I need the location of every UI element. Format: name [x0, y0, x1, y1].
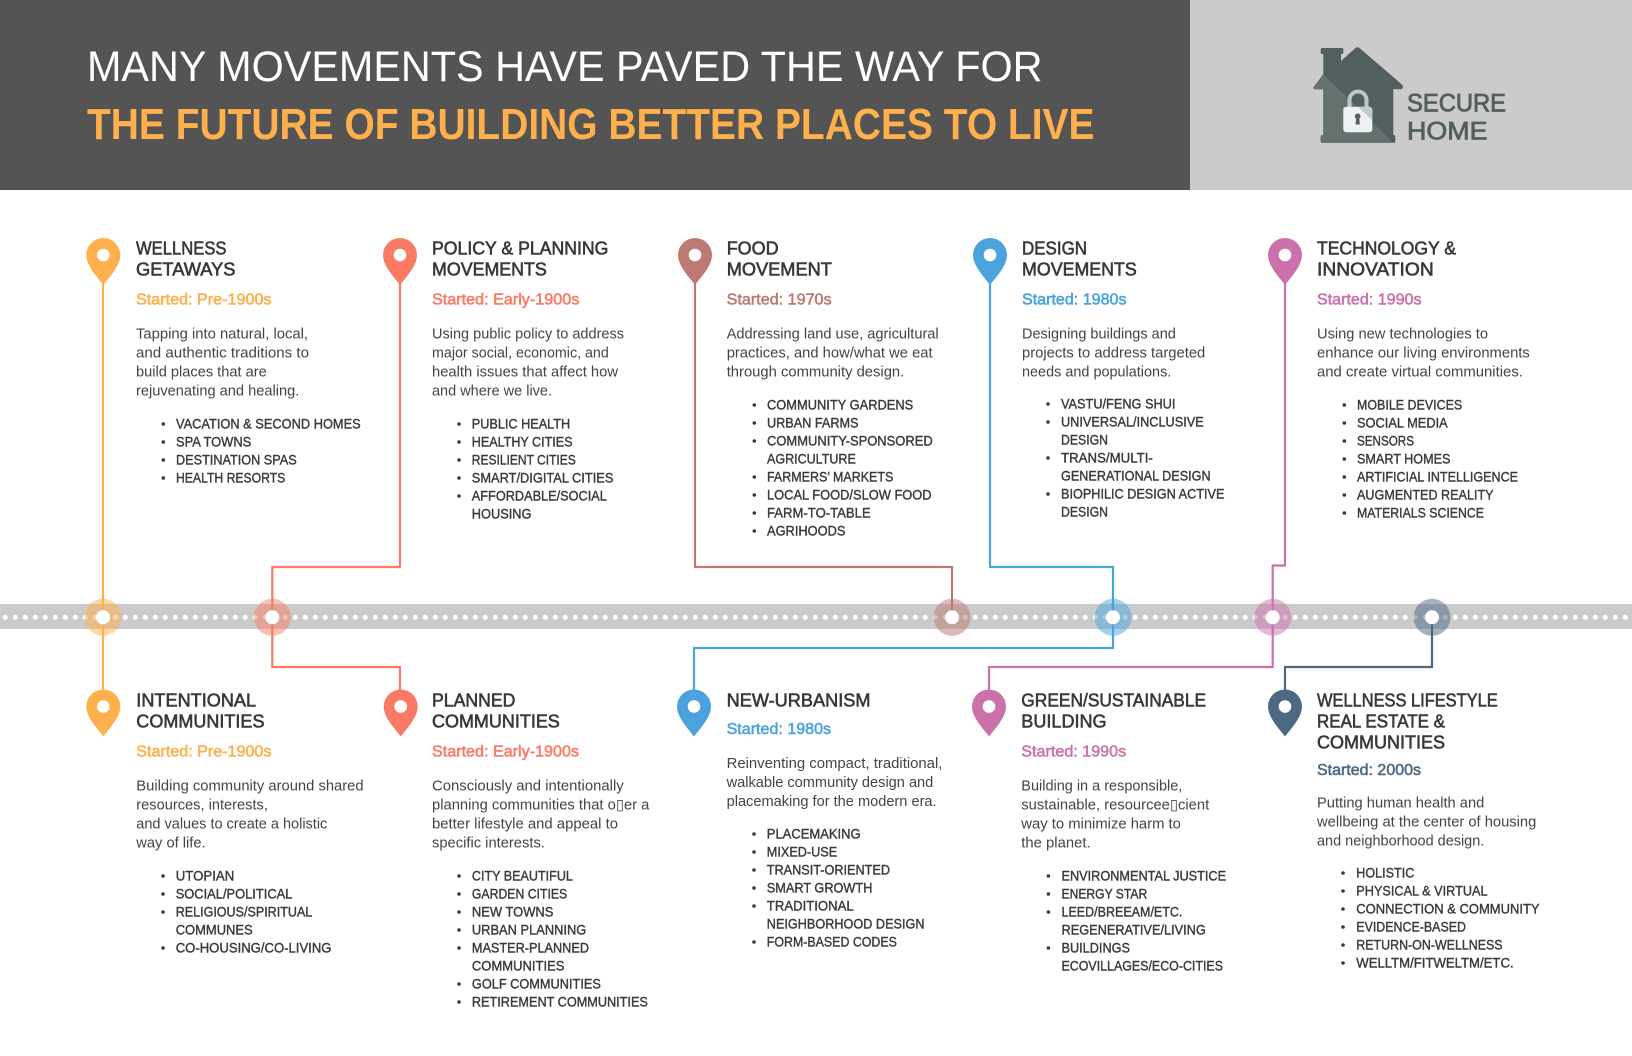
bullet list: CONNECTION & COMMUNITY	[1356, 901, 1540, 916]
description: sustainable, resourcee▯cient	[1021, 798, 1209, 814]
description: way to minimize harm to	[1020, 817, 1181, 833]
heading: REAL ESTATE &	[1317, 711, 1446, 732]
heading: WELLNESS LIFESTYLE	[1317, 690, 1498, 711]
bullet list: COMMUNITIES	[472, 958, 564, 973]
bullet list: NEW TOWNS	[472, 904, 553, 919]
header banner	[0, 0, 1190, 190]
bullet list: AFFORDABLE/SOCIAL	[472, 488, 607, 503]
bullet list: COMMUNITY-SPONSORED	[767, 433, 933, 448]
bullet list: AUGMENTED REALITY	[1357, 487, 1494, 502]
bullet list: GOLF COMMUNITIES	[472, 976, 601, 991]
description: and authentic traditions to	[136, 346, 309, 362]
heading	[136, 690, 264, 732]
heading: MOVEMENTS	[1022, 258, 1137, 279]
bullet list: PUBLIC HEALTH	[472, 416, 570, 431]
description	[1317, 327, 1530, 381]
bullet list: ENVIRONMENTAL JUSTICE	[1062, 868, 1226, 883]
bullet list: REGENERATIVE/LIVING	[1062, 922, 1206, 937]
description	[432, 779, 650, 852]
bullet list: DESIGN	[1061, 504, 1108, 519]
panel: wellness getaways	[86, 237, 361, 485]
bullet list: SOCIAL MEDIA	[1357, 415, 1448, 430]
logo wordmark: HOME	[1407, 117, 1488, 145]
bullet list: EVIDENCE-BASED	[1356, 919, 1466, 934]
bullet list: PHYSICAL & VIRTUAL	[1356, 883, 1488, 898]
start date: Started: 1980s	[1022, 291, 1127, 308]
description: enhance our living environments	[1317, 346, 1530, 362]
start date: Started: 1970s	[727, 291, 832, 308]
description: needs and populations.	[1022, 365, 1171, 381]
heading: INTENTIONAL	[136, 690, 256, 711]
bullet list: VACATION & SECOND HOMES	[176, 416, 361, 431]
panel: intentional communities	[86, 690, 364, 955]
panel: planned communities	[384, 690, 650, 1009]
description: planning communities that o▯er a	[432, 798, 650, 814]
heading: FOOD	[727, 237, 779, 258]
heading: COMMUNITIES	[1317, 732, 1445, 753]
connector: wellness getaways to intentional communities	[102, 270, 104, 700]
bullet list	[1047, 868, 1226, 973]
bullet list	[752, 397, 933, 538]
description: Reinventing compact, traditional,	[727, 756, 942, 772]
bullet list: RETIREMENT COMMUNITIES	[472, 994, 648, 1009]
timeline node halos	[84, 599, 1450, 636]
heading: MOVEMENTS	[432, 258, 547, 279]
bullet list: URBAN FARMS	[767, 415, 858, 430]
bullet list: TRANS/MULTI-	[1061, 450, 1153, 465]
bullet list: AGRICULTURE	[767, 451, 856, 466]
description: Tapping into natural, local,	[136, 327, 308, 343]
description: and values to create a holistic	[136, 817, 328, 833]
timeline band	[0, 604, 1632, 629]
description: Consciously and intentionally	[432, 779, 624, 795]
panel: design movements	[973, 237, 1224, 519]
description: placemaking for the modern era.	[727, 794, 937, 810]
heading: DESIGN	[1022, 237, 1087, 258]
description: major social, economic, and	[432, 346, 609, 362]
icon: house with padlock	[1313, 47, 1403, 143]
logo wordmark: SECURE	[1407, 90, 1506, 118]
description: Designing buildings and	[1022, 327, 1176, 343]
heading: MOVEMENT	[727, 258, 832, 279]
connector: wellness lifestyle	[1285, 617, 1432, 700]
bullet list: UNIVERSAL/INCLUSIVE	[1061, 414, 1204, 429]
heading	[1317, 237, 1457, 279]
bullet list: AGRIHOODS	[767, 523, 846, 538]
description: and neighborhood design.	[1317, 834, 1484, 850]
description: specific interests.	[432, 836, 545, 852]
bullet list: RESILIENT CITIES	[472, 452, 576, 467]
bullet list: HEALTHY CITIES	[472, 434, 572, 449]
bullet list: UTOPIAN	[176, 868, 234, 883]
connector: design movements to new urbanism	[694, 270, 1113, 700]
heading: PLANNED	[432, 690, 515, 711]
start date: Started: 1990s	[1317, 291, 1422, 308]
bullet list	[1046, 396, 1224, 519]
heading: WELLNESS	[136, 237, 226, 258]
description: wellbeing at the center of housing	[1316, 815, 1536, 831]
description	[726, 756, 942, 810]
description	[727, 327, 939, 381]
description: Putting human health and	[1317, 796, 1484, 812]
bullet list	[1342, 397, 1518, 520]
bullet list: LEED/BREEAM/ETC.	[1062, 904, 1182, 919]
bullet list: WELLTM/FITWELTM/ETC.	[1356, 955, 1514, 970]
title: THE FUTURE OF BUILDING BETTER PLACES TO LIVE	[87, 101, 1094, 149]
heading: INNOVATION	[1317, 258, 1434, 279]
title: MANY MOVEMENTS HAVE PAVED THE WAY FOR	[87, 43, 1042, 91]
bullet list: DESIGN	[1061, 432, 1108, 447]
bullet list: TRADITIONAL	[767, 898, 854, 913]
panel: new urbanism	[677, 690, 942, 949]
icon: pin	[384, 690, 418, 736]
icon: pin	[678, 238, 712, 285]
bullet list: MIXED-USE	[767, 844, 837, 859]
bullet list: MASTER-PLANNED	[472, 940, 589, 955]
description: practices, and how/what we eat	[727, 346, 933, 362]
heading: COMMUNITIES	[136, 711, 264, 732]
heading	[727, 237, 832, 279]
description: rejuvenating and healing.	[136, 384, 299, 400]
bullet list: FARMERS’ MARKETS	[767, 469, 893, 484]
heading	[136, 237, 236, 279]
bullet list: HOUSING	[472, 506, 532, 521]
heading: TECHNOLOGY &	[1317, 237, 1457, 258]
panel: wellness lifestyle real estate and communities	[1268, 690, 1540, 970]
connector: technology to green building	[989, 270, 1285, 700]
heading: GETAWAYS	[136, 258, 236, 279]
start date: Started: Pre-1900s	[136, 291, 272, 308]
bullet list: SENSORS	[1357, 433, 1414, 448]
bullet list: SOCIAL/POLITICAL	[176, 886, 293, 901]
bullet list: GARDEN CITIES	[472, 886, 567, 901]
bullet list: URBAN PLANNING	[472, 922, 586, 937]
bullet list	[752, 826, 924, 949]
description: the planet.	[1021, 836, 1091, 852]
bullet list: ENERGY STAR	[1062, 886, 1147, 901]
bullet list: LOCAL FOOD/SLOW FOOD	[767, 487, 932, 502]
start date: Started: 1990s	[1021, 744, 1126, 761]
description: walkable community design and	[726, 775, 933, 791]
start date: Started: Early-1900s	[432, 744, 579, 761]
description	[1020, 779, 1209, 852]
heading	[1021, 690, 1206, 732]
panel: green and sustainable building	[972, 690, 1226, 973]
description: way of life.	[135, 836, 206, 852]
bullet list: CITY BEAUTIFUL	[472, 868, 573, 883]
bullet list: FORM-BASED CODES	[767, 934, 897, 949]
icon: pin	[973, 238, 1007, 285]
bullet list: SPA TOWNS	[176, 434, 251, 449]
description: Addressing land use, agricultural	[727, 327, 939, 343]
logo panel	[1190, 0, 1632, 190]
bullet list	[161, 868, 332, 955]
bullet list	[1341, 865, 1540, 970]
bullet list: VASTU/FENG SHUI	[1061, 396, 1175, 411]
bullet list: BIOPHILIC DESIGN ACTIVE	[1061, 486, 1224, 501]
heading	[1317, 690, 1498, 753]
description: through community design.	[727, 365, 904, 381]
description: and where we live.	[432, 384, 552, 400]
description: Building community around shared	[136, 779, 364, 795]
panel: food movement	[678, 237, 939, 538]
bullet list: HOLISTIC	[1356, 865, 1414, 880]
icon: pin	[677, 690, 711, 736]
description: build places that are	[136, 365, 267, 381]
description	[135, 779, 364, 852]
description: projects to address targeted	[1022, 346, 1205, 362]
bullet list: MOBILE DEVICES	[1357, 397, 1462, 412]
heading: GREEN/SUSTAINABLE	[1021, 690, 1206, 711]
description: Using new technologies to	[1317, 327, 1488, 343]
icon: pin	[1268, 690, 1302, 736]
description	[136, 327, 309, 400]
bullet list: ECOVILLAGES/ECO-CITIES	[1062, 958, 1223, 973]
start date: Started: Early-1900s	[432, 291, 580, 308]
description	[1316, 796, 1536, 850]
description: resources, interests,	[136, 798, 268, 814]
icon: pin	[86, 690, 120, 736]
bullet list: MATERIALS SCIENCE	[1357, 505, 1484, 520]
description: Using public policy to address	[432, 327, 624, 343]
heading: NEW-URBANISM	[727, 690, 870, 711]
connector: policy and planning to planned communities	[272, 270, 400, 700]
heading: POLICY & PLANNING	[432, 237, 608, 258]
description: better lifestyle and appeal to	[432, 817, 618, 833]
bullet list: NEIGHBORHOOD DESIGN	[767, 916, 924, 931]
bullet list	[457, 868, 648, 1009]
bullet list	[457, 416, 613, 521]
heading	[432, 237, 608, 279]
title	[87, 43, 1094, 149]
description	[432, 327, 624, 400]
bullet list: PLACEMAKING	[767, 826, 861, 841]
icon: pin	[972, 690, 1006, 736]
heading	[1022, 237, 1137, 279]
bullet list	[162, 416, 361, 485]
description: health issues that affect how	[432, 365, 618, 381]
bullet list: SMART HOMES	[1357, 451, 1450, 466]
connector: food movement	[695, 270, 952, 617]
bullet list: COMMUNITY GARDENS	[767, 397, 913, 412]
bullet list: CO-HOUSING/CO-LIVING	[176, 940, 332, 955]
start date: Started: Pre-1900s	[136, 744, 272, 761]
bullet list: SMART/DIGITAL CITIES	[472, 470, 613, 485]
icon: pin	[86, 238, 120, 285]
panel: technology and innovation	[1268, 237, 1530, 520]
icon: pin	[383, 238, 417, 285]
bullet list: GENERATIONAL DESIGN	[1061, 468, 1211, 483]
description	[1022, 327, 1205, 381]
heading	[432, 690, 560, 732]
bullet list: BUILDINGS	[1062, 940, 1130, 955]
bullet list: DESTINATION SPAS	[176, 452, 297, 467]
start date: Started: 1980s	[727, 721, 831, 738]
heading: COMMUNITIES	[432, 711, 560, 732]
description: Building in a responsible,	[1021, 779, 1182, 795]
bullet list: RETURN-ON-WELLNESS	[1356, 937, 1503, 952]
timeline node centres	[96, 610, 1439, 624]
bullet list: HEALTH RESORTS	[176, 470, 285, 485]
bullet list: RELIGIOUS/SPIRITUAL	[176, 904, 313, 919]
logo wordmark	[1407, 90, 1506, 145]
bullet list: ARTIFICIAL INTELLIGENCE	[1357, 469, 1518, 484]
start date: Started: 2000s	[1317, 762, 1421, 779]
heading: BUILDING	[1021, 711, 1107, 732]
panel: policy and planning movements	[383, 237, 624, 521]
bullet list: COMMUNES	[176, 922, 253, 937]
icon: pin	[1268, 238, 1302, 285]
bullet list: FARM-TO-TABLE	[767, 505, 871, 520]
bullet list: TRANSIT-ORIENTED	[767, 862, 890, 877]
description: and create virtual communities.	[1317, 365, 1523, 381]
bullet list: SMART GROWTH	[767, 880, 872, 895]
